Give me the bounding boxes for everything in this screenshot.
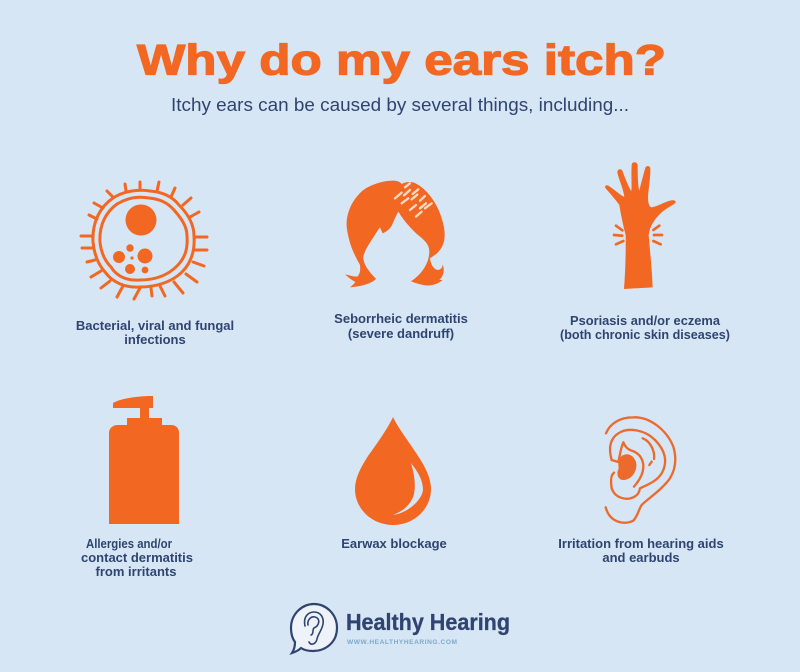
label: psoriasis and eczema bbox=[560, 313, 730, 342]
label: earwax blockage: Earwax blockage bbox=[341, 536, 447, 551]
icon: raised hand bbox=[605, 162, 676, 289]
logo: Healthy Hearing bbox=[291, 604, 510, 653]
label: seborrheic dermatitis bbox=[334, 311, 468, 341]
label: irritation from hearing aids bbox=[558, 536, 724, 565]
label: infections: infections bbox=[124, 332, 186, 347]
icon: hair with dandruff bbox=[345, 181, 445, 287]
label: allergies bbox=[81, 536, 193, 579]
logo url: WWW.HEALTHYHEARING.COM bbox=[347, 639, 458, 646]
icon: ear with earbud bbox=[606, 417, 675, 523]
label: irritation from hearing aids: Irritation from hearing aids bbox=[558, 536, 724, 551]
label: psoriasis and eczema: Psoriasis and/or eczema bbox=[570, 313, 721, 328]
logo wordmark: Healthy Hearing bbox=[346, 609, 510, 635]
icon: speech bubble with ear bbox=[291, 604, 337, 653]
label: irritation from hearing aids: and earbuds bbox=[602, 550, 680, 565]
icon: germ cell bbox=[81, 182, 207, 299]
label: psoriasis and eczema: (both chronic skin diseases) bbox=[560, 327, 730, 342]
label: infections bbox=[76, 318, 234, 347]
label: infections: Bacterial, viral and fungal bbox=[76, 318, 234, 333]
subtitle: Itchy ears can be caused by several things, including... bbox=[171, 95, 629, 115]
label: seborrheic dermatitis: Seborrheic dermatitis bbox=[334, 311, 468, 326]
title: Why do my ears itch? bbox=[137, 38, 666, 84]
icon: pump bottle bbox=[109, 396, 179, 524]
label: allergies: Allergies and/or bbox=[86, 536, 172, 551]
label: seborrheic dermatitis: (severe dandruff) bbox=[348, 326, 454, 341]
label: allergies: contact dermatitis bbox=[81, 550, 193, 565]
label: allergies: from irritants bbox=[96, 564, 176, 579]
icon: earwax drop bbox=[355, 417, 431, 525]
